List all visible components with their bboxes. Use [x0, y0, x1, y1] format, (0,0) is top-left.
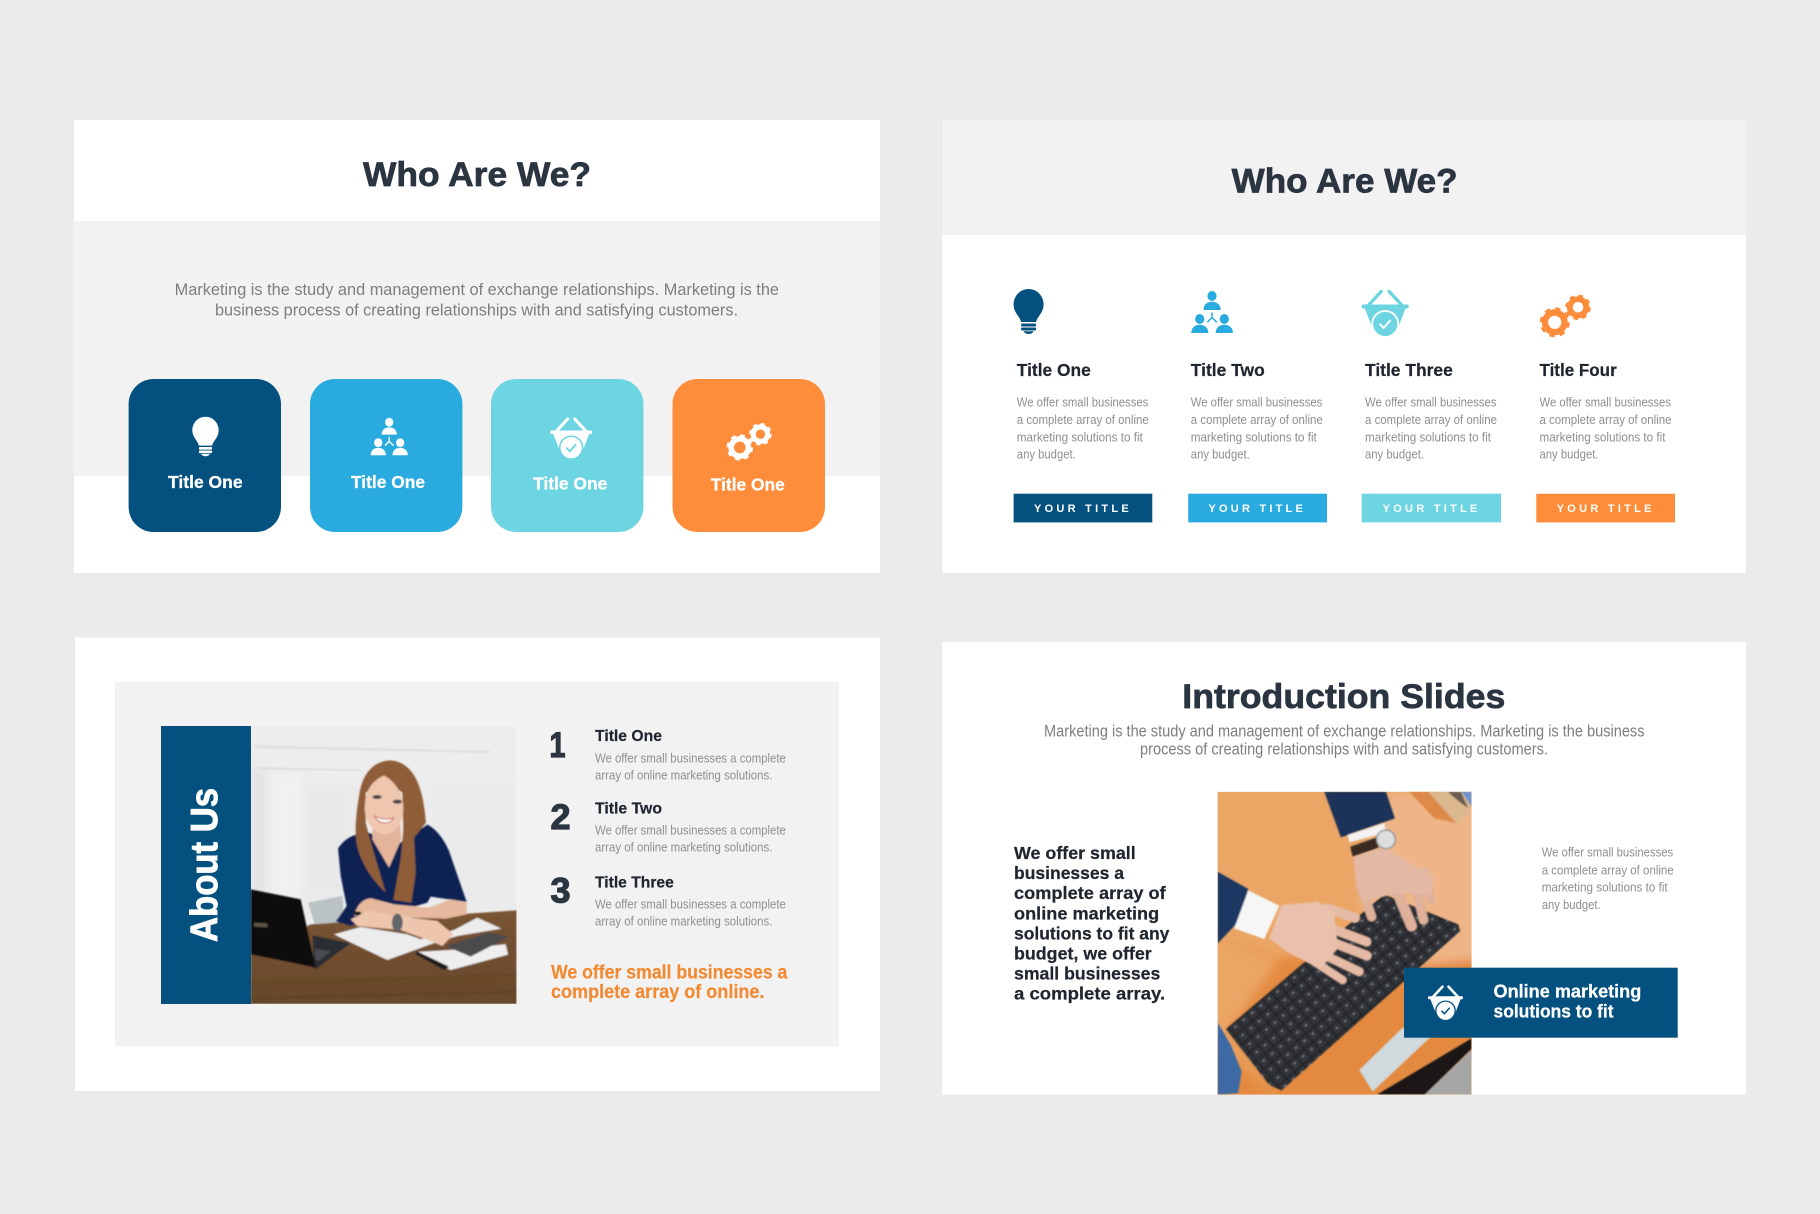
column text: any budget. — [1365, 448, 1424, 462]
box — [1428, 792, 1472, 823]
chair — [308, 896, 345, 924]
column text — [1017, 396, 1149, 462]
panel: who are we, four columns — [942, 120, 1746, 573]
bold statement: solutions to fit any — [1014, 923, 1170, 943]
icon: gears — [1541, 296, 1589, 336]
icon: basket — [550, 419, 592, 459]
photo: woman at desk — [251, 726, 517, 1004]
side bar with vertical title: About Us — [184, 788, 226, 942]
right text — [1542, 846, 1674, 912]
top sleeve — [1324, 792, 1395, 837]
icon: light bulb — [192, 417, 219, 456]
button — [1536, 494, 1675, 522]
column text: marketing solutions to fit — [1191, 430, 1317, 444]
item one — [550, 726, 786, 783]
side bar with vertical title — [161, 726, 251, 1004]
card: dark blue idea — [129, 379, 281, 532]
button: YOUR TITLE — [1383, 503, 1477, 515]
keyboard — [1226, 894, 1460, 1090]
item text: array of online marketing solutions. — [595, 841, 772, 855]
orange callout text: complete array of online. — [551, 982, 764, 1003]
number 1: 1 — [550, 726, 566, 765]
item text — [595, 823, 786, 855]
column title: Title One — [1017, 360, 1091, 380]
watch — [1350, 837, 1378, 857]
face — [365, 775, 403, 834]
watch — [392, 914, 403, 932]
intro paragraph: process of creating relationships with and satisfying customers. — [1140, 740, 1548, 759]
orange callout text — [551, 962, 788, 1003]
item title: Title Two — [595, 800, 662, 817]
column title: Title Four — [1540, 360, 1617, 380]
heading: who are we: Who Are We? — [363, 156, 591, 194]
neck — [372, 823, 401, 868]
button: YOUR TITLE — [1208, 503, 1303, 515]
callout text — [1494, 982, 1641, 1022]
column text: a complete array of online — [1017, 413, 1149, 427]
right text: a complete array of online — [1542, 863, 1674, 877]
panel: about us — [75, 638, 880, 1091]
open book — [334, 918, 501, 960]
callout text: Online marketing — [1494, 982, 1641, 1002]
icon: basket — [1362, 292, 1409, 337]
intro paragraph: Marketing is the study and management of exchange relationships. Marketing is the business — [1044, 722, 1644, 741]
column text: marketing solutions to fit — [1365, 430, 1491, 444]
column text: We offer small businesses — [1540, 396, 1671, 410]
bold statement: online marketing — [1014, 903, 1159, 923]
button — [1362, 494, 1501, 522]
icon: gears — [728, 424, 770, 459]
intro paragraph: Marketing is the study and management of exchange relationships. Marketing is the — [175, 280, 779, 299]
item text: We offer small businesses a complete — [595, 823, 786, 837]
papers — [416, 944, 508, 970]
card label: Title One — [533, 474, 608, 494]
column text — [1191, 396, 1323, 462]
item title: Title One — [595, 728, 662, 745]
column three — [1362, 292, 1501, 522]
column text: any budget. — [1017, 448, 1076, 462]
bold statement: businesses a — [1014, 863, 1124, 883]
left hand — [1314, 908, 1367, 980]
item text — [595, 897, 786, 929]
number 2: 2 — [550, 798, 570, 837]
column two — [1188, 291, 1327, 522]
bold statement: budget, we offer — [1014, 943, 1152, 963]
bold statement: complete array of — [1014, 883, 1166, 903]
laptop — [312, 935, 351, 969]
item title: Title Three — [595, 874, 674, 891]
item text: array of online marketing solutions. — [595, 915, 772, 929]
bold statement: We offer small — [1014, 843, 1136, 863]
monitor — [1359, 1028, 1431, 1092]
intro paragraph — [175, 280, 779, 320]
callout box — [1404, 968, 1678, 1038]
column four — [1536, 296, 1675, 522]
left sleeve — [1218, 872, 1248, 944]
forearms — [354, 899, 467, 919]
icon: light bulb — [1014, 289, 1044, 334]
photo: hands on keyboard — [1208, 792, 1484, 1102]
button: YOUR TITLE — [1557, 503, 1652, 515]
column text — [1365, 396, 1497, 462]
card label: Title One — [711, 475, 785, 495]
panel: introduction slides — [942, 642, 1746, 1102]
icon: basket — [1428, 987, 1463, 1020]
right text: marketing solutions to fit — [1542, 881, 1668, 895]
right text: We offer small businesses — [1542, 846, 1673, 860]
column text: any budget. — [1191, 448, 1250, 462]
orange callout text: We offer small businesses a — [551, 962, 788, 983]
column title: Title Two — [1191, 360, 1265, 380]
number 3: 3 — [550, 872, 570, 910]
card label: Title One — [168, 472, 243, 492]
bottom left sleeve — [1218, 1022, 1242, 1095]
card: teal basket — [491, 379, 643, 532]
icon: people — [1191, 291, 1233, 333]
heading: introduction slides: Introduction Slides — [1182, 678, 1505, 716]
column text: a complete array of online — [1365, 413, 1497, 427]
column text — [1540, 396, 1672, 462]
intro paragraph — [1044, 722, 1644, 759]
item text — [595, 751, 786, 783]
item two — [550, 798, 786, 855]
panel: who are we, colored cards — [74, 120, 880, 573]
column text: a complete array of online — [1191, 413, 1323, 427]
heading: who are we: Who Are We? — [1232, 163, 1458, 201]
column text: We offer small businesses — [1365, 396, 1496, 410]
shirt — [336, 825, 467, 926]
item text: array of online marketing solutions. — [595, 769, 772, 783]
card label: Title One — [351, 472, 425, 492]
button — [1014, 494, 1152, 522]
hair — [356, 760, 426, 903]
bold statement: a complete array. — [1014, 984, 1165, 1004]
button: YOUR TITLE — [1034, 503, 1129, 515]
item text: We offer small businesses a complete — [595, 751, 786, 765]
column title: Title Three — [1365, 360, 1453, 380]
right text: any budget. — [1542, 898, 1601, 912]
card: blue team — [310, 379, 462, 532]
column one — [1014, 289, 1152, 522]
callout text: solutions to fit — [1494, 1002, 1614, 1022]
icon: people — [371, 418, 408, 455]
column text: We offer small businesses — [1017, 396, 1148, 410]
column text: marketing solutions to fit — [1540, 430, 1666, 444]
column text: any budget. — [1540, 448, 1598, 462]
table — [251, 910, 517, 1004]
column text: marketing solutions to fit — [1017, 430, 1143, 444]
bold statement: small businesses — [1014, 964, 1161, 984]
item three — [550, 872, 786, 929]
card: orange gears — [672, 379, 825, 532]
intro paragraph: business process of creating relationships with and satisfying customers. — [215, 300, 738, 320]
column text: a complete array of online — [1540, 413, 1672, 427]
right hand — [1361, 872, 1431, 926]
column text: We offer small businesses — [1191, 396, 1322, 410]
item text: We offer small businesses a complete — [595, 897, 786, 911]
button — [1188, 494, 1327, 522]
bold statement — [1014, 843, 1170, 1004]
